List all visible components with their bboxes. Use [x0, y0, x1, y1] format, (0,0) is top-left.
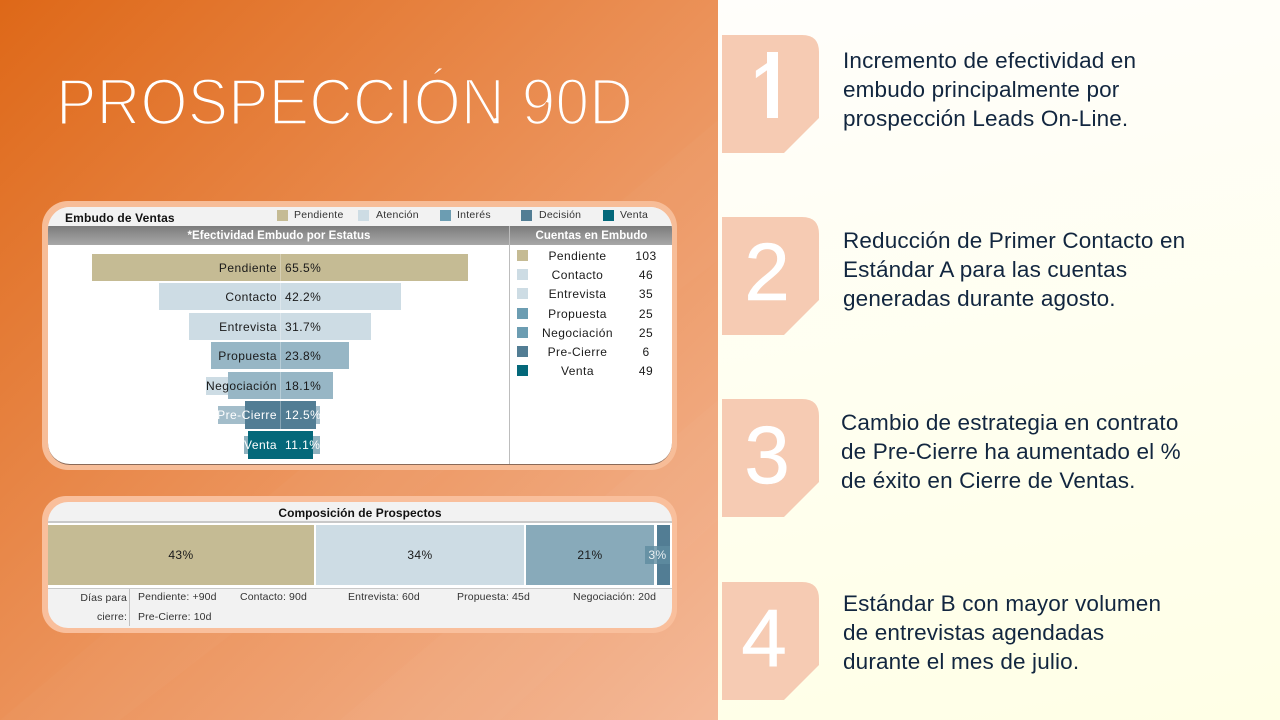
- funnel labels: Pendiente: [219, 261, 277, 275]
- days to close labels: Días para: [80, 592, 127, 604]
- panel: composición de prospectos: [42, 496, 677, 633]
- segment: 3%: [657, 525, 670, 585]
- text 3: Cambio de estrategia en contrato: [841, 410, 1178, 435]
- heading: composición de prospectos: Composición de Prospectos: [278, 506, 442, 520]
- segment: 34%: 34%: [407, 548, 433, 562]
- days to close labels: Pendiente: +90d: [138, 591, 217, 603]
- panel: embudo de ventas: [42, 201, 677, 470]
- funnel chart: [92, 254, 468, 459]
- accounts table: Entrevista: [549, 287, 606, 301]
- accounts table: [517, 249, 657, 378]
- label back: Venta: [244, 436, 320, 454]
- days to close labels: Entrevista: 60d: [348, 591, 420, 603]
- text 2: generadas durante agosto.: [843, 286, 1116, 311]
- heading: cuentas en embudo: Cuentas en Embudo: [535, 230, 648, 242]
- bar: Propuesta: [211, 342, 349, 369]
- text 3: [841, 410, 1181, 493]
- left orange background panel: [0, 0, 718, 720]
- accounts table: Contacto: [552, 268, 603, 282]
- badge 4: 4: [741, 593, 787, 684]
- accounts table: 25: [639, 326, 653, 340]
- funnel labels: 31.7%: [285, 320, 321, 334]
- funnel labels: 65.5%: [285, 261, 321, 275]
- days to close labels: Propuesta: 45d: [457, 591, 530, 603]
- badge 3: 3: [744, 410, 790, 501]
- text 4: durante el mes de julio.: [843, 649, 1079, 674]
- text 2: Reducción de Primer Contacto en: [843, 228, 1185, 253]
- accounts table: 46: [639, 268, 653, 282]
- funnel labels: Pre-Cierre: [217, 408, 277, 422]
- funnel labels: Negociación: [206, 379, 277, 393]
- label: 3%: 3%: [648, 548, 667, 562]
- text 4: de entrevistas agendadas: [843, 620, 1104, 645]
- text 2: Estándar A para las cuentas: [843, 257, 1127, 282]
- funnel labels: Contacto: [225, 290, 277, 304]
- bar: Contacto: [159, 283, 401, 310]
- center divider: [280, 254, 281, 429]
- legend: etapas: Decisión: [539, 209, 581, 221]
- segment: 21%: [526, 525, 654, 585]
- heading: efectividad embudo: *Efectividad Embudo por Estatus: [187, 230, 371, 242]
- text 2: [843, 228, 1185, 311]
- label back: Negociación: [206, 377, 236, 395]
- days to close labels: Pre-Cierre: 10d: [138, 611, 212, 623]
- legend: etapas: Atención: [376, 209, 419, 221]
- segment: 21%: 21%: [577, 548, 603, 562]
- bar: Negociación: [228, 372, 333, 399]
- text 4: [843, 591, 1161, 674]
- accounts table: 25: [639, 307, 653, 321]
- text 1: embudo principalmente por: [843, 77, 1119, 102]
- badge 1: [722, 35, 819, 153]
- text 1: [843, 48, 1136, 131]
- accounts table: Pendiente: [548, 249, 607, 263]
- funnel labels: Entrevista: [219, 320, 277, 334]
- accounts table: 49: [639, 364, 653, 378]
- days to close labels: Negociación: 20d: [573, 591, 656, 603]
- text 1: Incremento de efectividad en: [843, 48, 1136, 73]
- label: 3%: [645, 546, 670, 564]
- funnel labels: Venta: [244, 438, 277, 452]
- text 1: prospección Leads On-Line.: [843, 106, 1128, 131]
- legend: etapas: Interés: [457, 209, 491, 221]
- funnel labels: 42.2%: [285, 290, 321, 304]
- right cream background panel: [718, 0, 1280, 720]
- accounts table: Negociación: [542, 326, 613, 340]
- funnel labels: 12.5%: [285, 408, 321, 422]
- badge 2: 2: [744, 227, 790, 318]
- accounts table: Pre-Cierre: [548, 345, 607, 359]
- panel heading: embudo de ventas: Embudo de Ventas: [65, 211, 175, 225]
- badge 3: [722, 399, 819, 517]
- accounts table: Venta: [561, 364, 594, 378]
- accounts table: 6: [642, 345, 650, 359]
- badge 2: [722, 217, 819, 335]
- accounts table: Propuesta: [548, 307, 607, 321]
- funnel labels: Propuesta: [218, 349, 277, 363]
- segment: 43%: 43%: [168, 548, 194, 562]
- funnel labels: 11.1%: [285, 438, 320, 452]
- legend: etapas: Pendiente: [294, 209, 344, 221]
- bar: Venta: [248, 431, 313, 459]
- days to close labels: [80, 591, 656, 623]
- days to close labels: Contacto: 90d: [240, 591, 307, 603]
- text 3: de éxito en Cierre de Ventas.: [841, 468, 1136, 493]
- funnel labels: [206, 261, 321, 452]
- text 3: de Pre-Cierre ha aumentado el %: [841, 439, 1181, 464]
- badge 4: [722, 582, 819, 700]
- badge 1: 1: [748, 45, 794, 136]
- text 4: Estándar B con mayor volumen: [843, 591, 1161, 616]
- legend: etapas: [277, 209, 648, 221]
- bar: Pendiente: [92, 254, 468, 281]
- funnel labels: 23.8%: [285, 349, 321, 363]
- segment: 43%: [48, 525, 314, 585]
- days to close labels: cierre:: [97, 611, 127, 623]
- accounts table: 103: [635, 249, 657, 263]
- bar: Pre-Cierre: [245, 401, 316, 429]
- funnel labels: 18.1%: [285, 379, 321, 393]
- stacked bar chart: [48, 525, 670, 585]
- bar: Entrevista: [189, 313, 371, 340]
- label back: Pre-Cierre: [218, 406, 320, 424]
- legend: etapas: Venta: [620, 209, 648, 221]
- segment: 34%: [316, 525, 524, 585]
- accounts table: 35: [639, 287, 653, 301]
